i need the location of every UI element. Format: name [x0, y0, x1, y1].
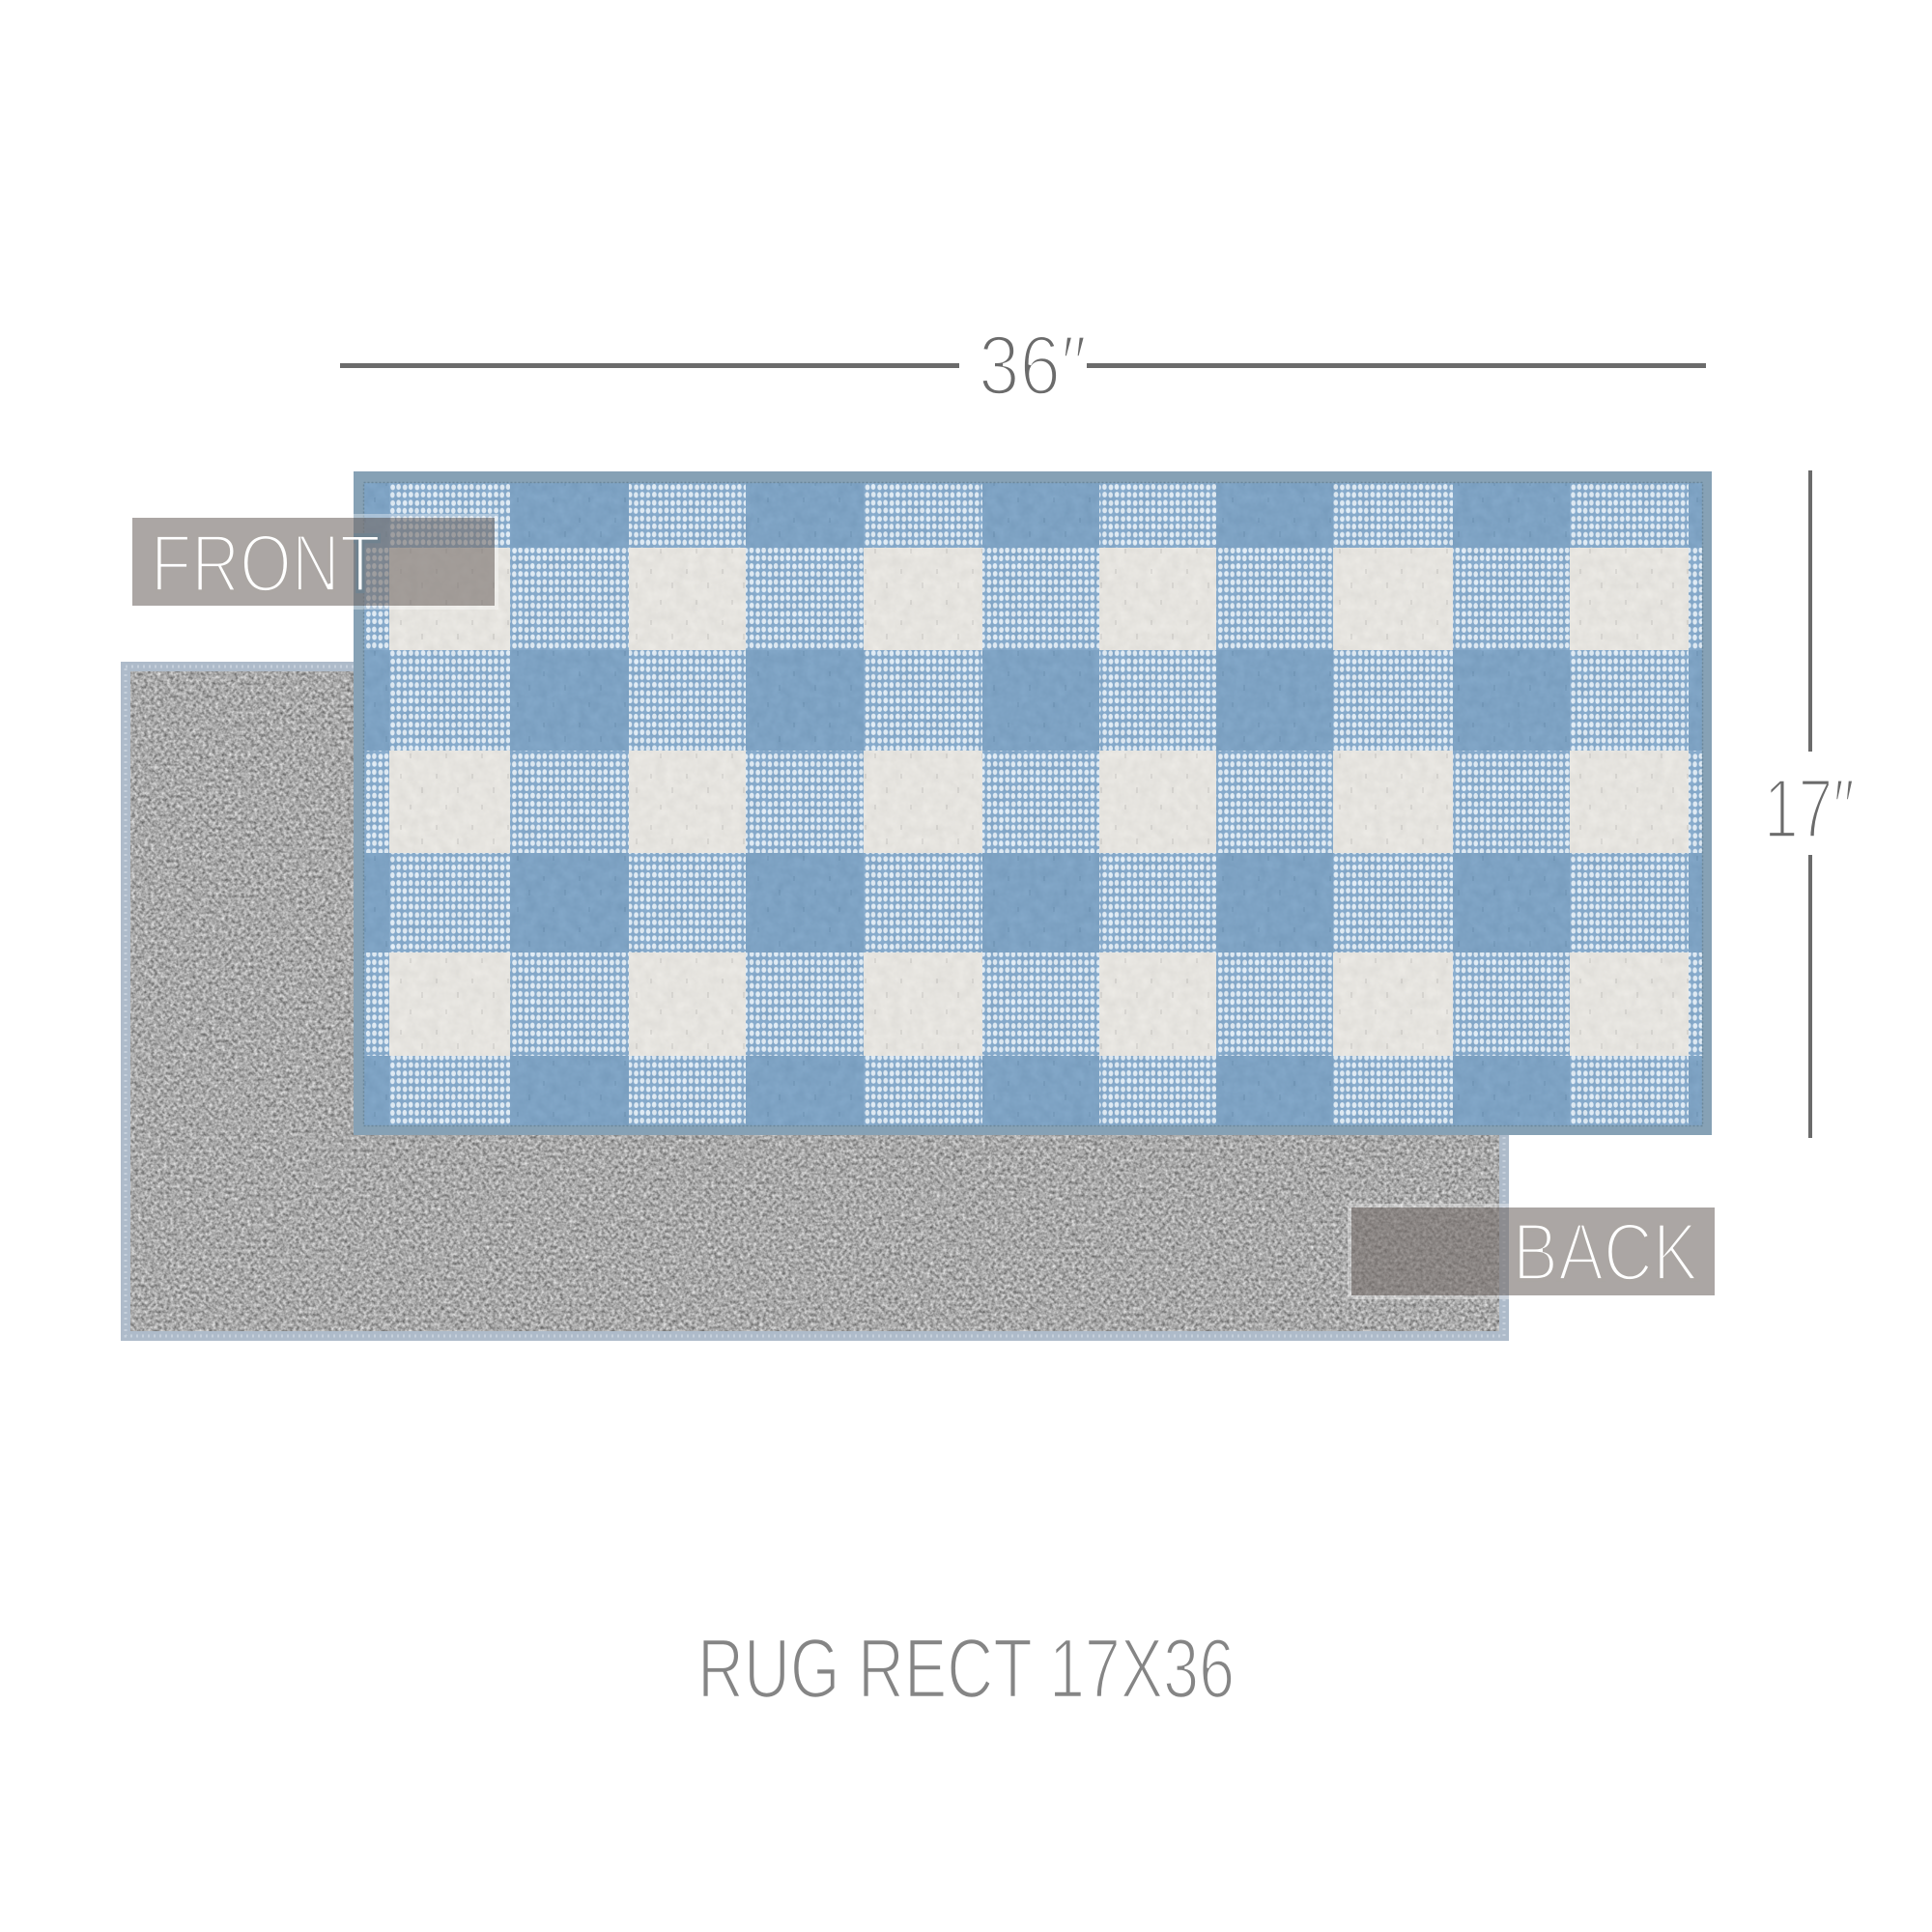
width dimension: 36 inches [340, 319, 1706, 412]
rug front stitching [363, 483, 1702, 1126]
rug front [354, 471, 1712, 1135]
label: BACK: BACK [1513, 1207, 1698, 1297]
title: product name: RUG RECT 17X36 [697, 1622, 1235, 1716]
label: FRONT: FRONT [151, 518, 381, 609]
width dimension: 36 inches: 36″ [979, 319, 1087, 412]
rug front cream squares [389, 548, 1689, 1056]
height dimension: 17 inches: 17″ [1764, 762, 1855, 856]
rug front solid blue squares [364, 483, 1702, 1125]
rug back [121, 662, 1509, 1341]
label: BACK [1350, 1206, 1717, 1297]
height dimension: 17 inches [1764, 470, 1855, 1138]
rug front fabric grain [364, 483, 1702, 1125]
rug front binding [354, 471, 1712, 1135]
rug front light check field [364, 483, 1702, 1125]
